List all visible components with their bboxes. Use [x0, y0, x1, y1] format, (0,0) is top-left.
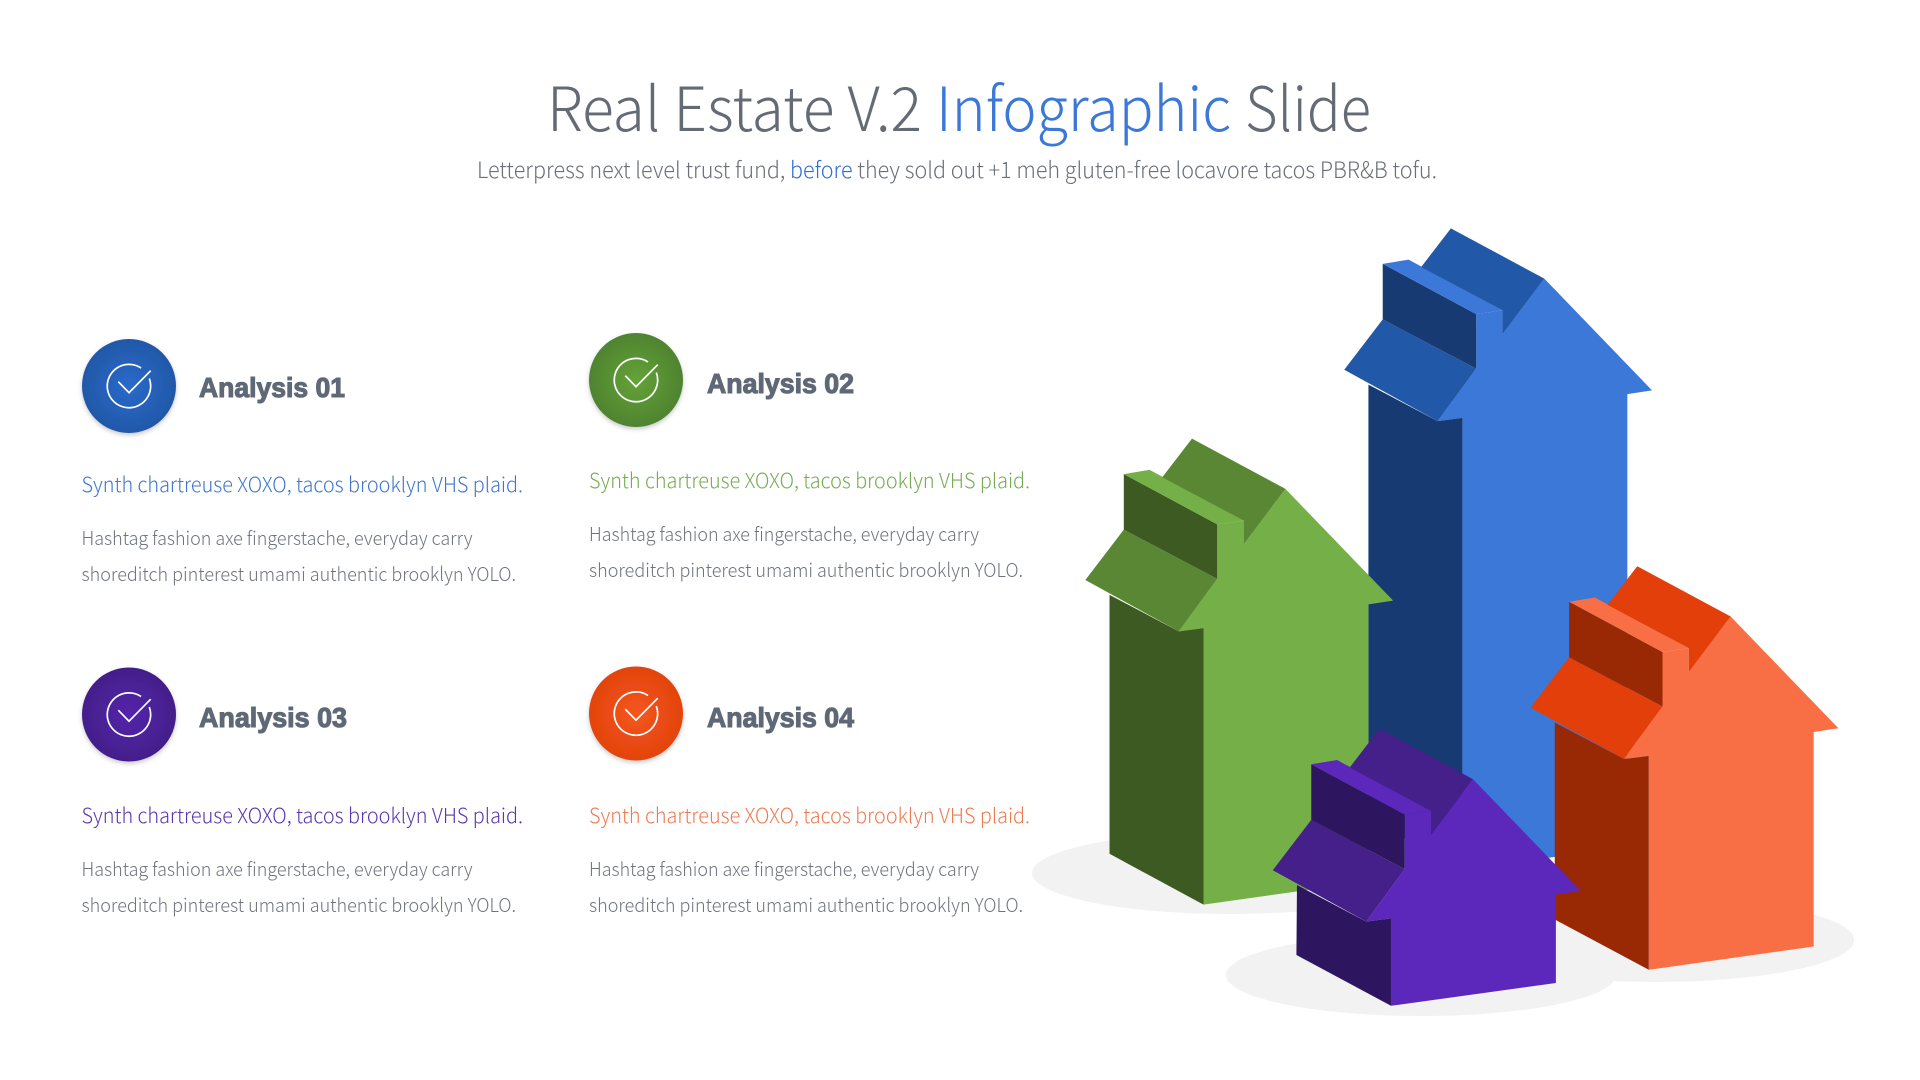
lead line: Synth chartreuse XOXO, tacos brooklyn VHS plaid.: [82, 468, 523, 498]
title: Infographic: [936, 60, 1231, 149]
panel: analysis 02: [589, 333, 1030, 583]
body text: shoreditch pinterest umami authentic brooklyn YOLO.: [82, 560, 516, 587]
panel: analysis 03: [82, 668, 523, 918]
house: purple: [1273, 729, 1581, 1006]
heading: Analysis 04: [707, 702, 854, 733]
title: Slide: [1245, 60, 1371, 149]
heading: Analysis 03: [199, 702, 347, 733]
body text: Hashtag fashion axe fingerstache, everyday carry: [589, 520, 980, 547]
house: orange: [1531, 566, 1838, 970]
house: green: [1085, 439, 1393, 905]
icon: purple check badge: [82, 668, 176, 762]
heading: Analysis 02: [707, 368, 854, 399]
panel: analysis 01: [82, 339, 523, 587]
icon: orange check badge: [589, 666, 683, 760]
body text: Hashtag fashion axe fingerstache, everyday carry: [82, 524, 473, 551]
lead line: Synth chartreuse XOXO, tacos brooklyn VHS plaid.: [589, 464, 1030, 494]
title: [547, 60, 1371, 149]
title: Real Estate V.2: [547, 60, 922, 149]
body text: [82, 524, 516, 587]
heading: Analysis 01: [199, 372, 345, 403]
body text: shoreditch pinterest umami authentic brooklyn YOLO.: [82, 891, 516, 918]
body text: Hashtag fashion axe fingerstache, everyday carry: [589, 855, 980, 882]
illustration: houses: [1032, 228, 1854, 1016]
icon: blue check badge: [82, 339, 176, 433]
lead line: Synth chartreuse XOXO, tacos brooklyn VHS plaid.: [82, 799, 523, 829]
body text: [589, 520, 1023, 583]
body text: shoreditch pinterest umami authentic brooklyn YOLO.: [589, 556, 1023, 583]
house: blue tower: [1344, 228, 1652, 870]
body text: Hashtag fashion axe fingerstache, everyday carry: [82, 855, 473, 882]
icon: green check badge: [589, 333, 683, 427]
body text: [589, 855, 1023, 918]
lead line: Synth chartreuse XOXO, tacos brooklyn VHS plaid.: [589, 799, 1030, 829]
panel: analysis 04: [589, 666, 1030, 918]
body text: [82, 855, 516, 918]
ground shadows: [1032, 832, 1854, 1016]
body text: shoreditch pinterest umami authentic brooklyn YOLO.: [589, 891, 1023, 918]
subtitle: Letterpress next level trust fund, before they sold out +1 meh gluten-free locavore tacos PBR&B tofu.: [477, 153, 1437, 185]
